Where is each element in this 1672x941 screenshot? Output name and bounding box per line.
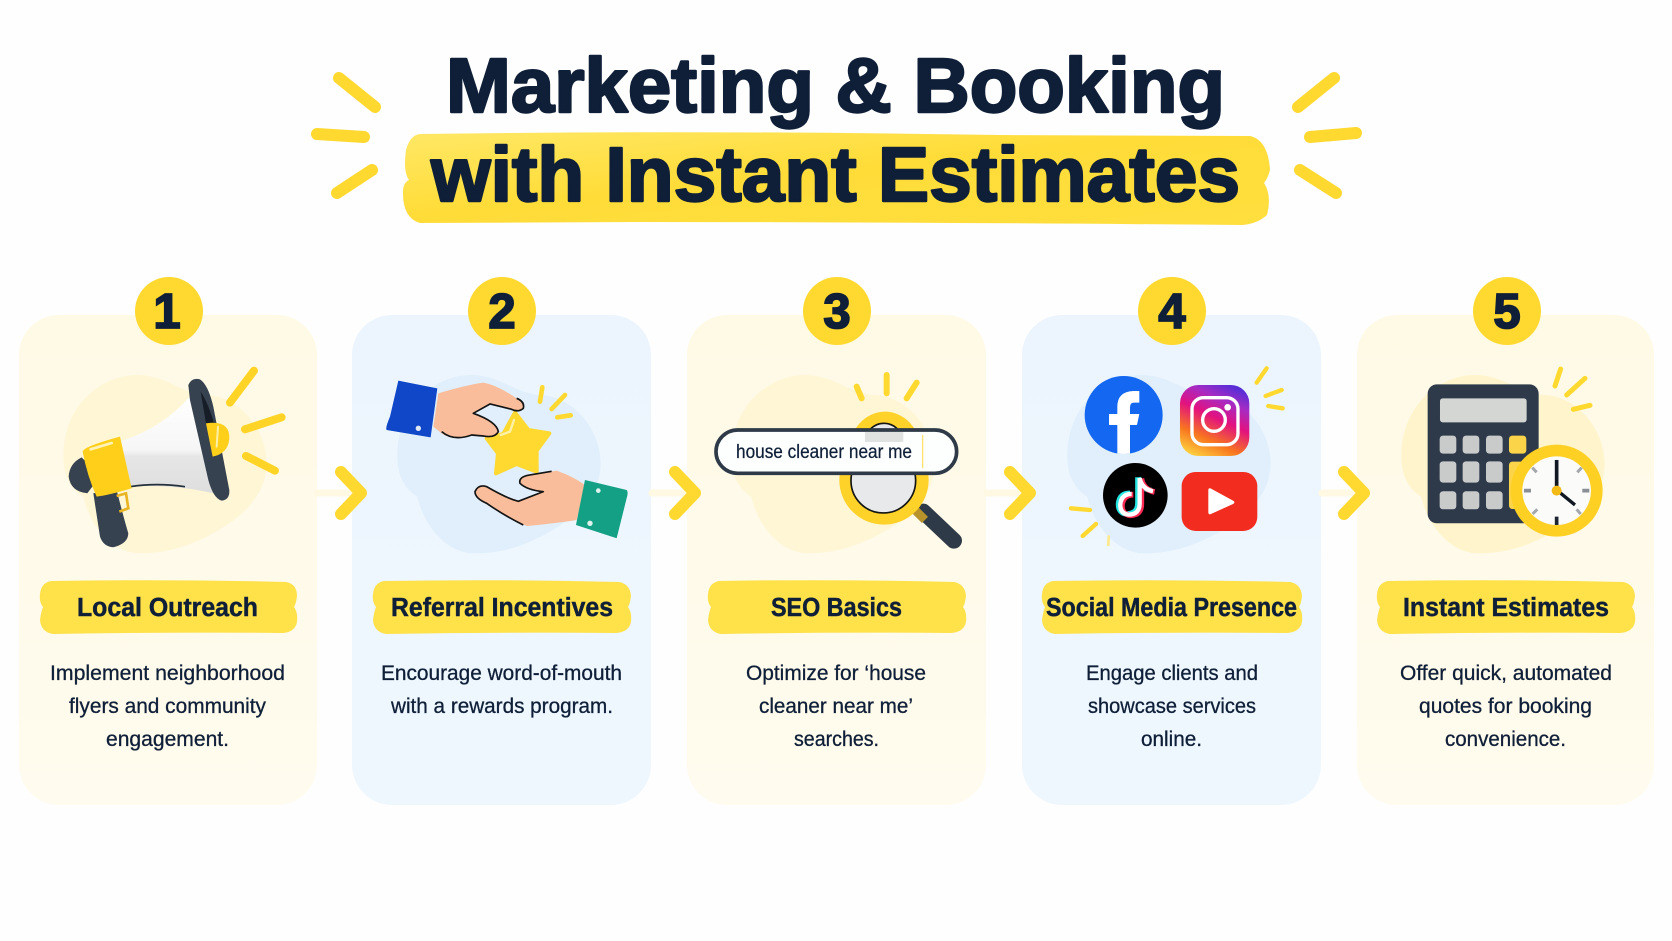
arrow 1 to 2 <box>318 472 361 514</box>
icon: hands and star <box>386 381 628 538</box>
icon blob <box>1067 375 1271 553</box>
heading pill: local outreach: Local Outreach <box>77 594 258 622</box>
panel: social media presence <box>1022 277 1321 805</box>
title rays right <box>1298 78 1356 193</box>
arrow 3 to 4 <box>987 472 1030 514</box>
tiktok <box>1103 463 1168 528</box>
badge 4 <box>1138 277 1206 345</box>
icon: social logos <box>1071 368 1283 545</box>
icon: magnifier and search bar <box>716 375 957 541</box>
arrow 2 to 3 <box>652 472 695 514</box>
title line 1: Marketing & Booking <box>446 43 1225 129</box>
title rays left <box>317 78 375 193</box>
description: local outreach: Implement neighborhood <box>50 661 285 685</box>
panel: seo basics <box>687 277 986 805</box>
description: social media presence: online. <box>1141 727 1202 751</box>
description: seo basics: Optimize for ‘house <box>746 661 926 685</box>
heading pill: instant estimates: Instant Estimates <box>1403 594 1609 622</box>
badge 4: 4 <box>1158 285 1186 339</box>
description: local outreach <box>50 661 285 751</box>
heading pill: social media presence: Social Media Presence <box>1046 594 1297 622</box>
panel: local outreach <box>19 277 317 805</box>
description: seo basics: searches. <box>794 727 879 751</box>
badge 3 <box>803 277 871 345</box>
description: instant estimates: convenience. <box>1445 727 1566 751</box>
instagram <box>1180 385 1249 456</box>
panel: instant estimates <box>1357 277 1654 805</box>
description: local outreach: flyers and community <box>69 694 266 718</box>
badge 5: 5 <box>1493 285 1521 339</box>
arrow 4 to 5 <box>1322 472 1364 514</box>
description: instant estimates: Offer quick, automated <box>1400 661 1612 685</box>
youtube <box>1182 472 1257 531</box>
icon: megaphone <box>69 371 282 547</box>
title line 2: with Instant Estimates <box>430 132 1240 218</box>
description: referral incentives: Encourage word-of-mouth <box>381 661 622 685</box>
description: seo basics <box>746 661 926 751</box>
badge 3: 3 <box>823 285 851 339</box>
description: instant estimates <box>1400 661 1612 751</box>
heading pill: social media presence <box>1042 580 1302 634</box>
heading pill: referral incentives <box>373 580 631 634</box>
description: referral incentives <box>381 661 622 718</box>
badge 5 <box>1473 277 1541 345</box>
icon: calculator and clock <box>1428 369 1603 537</box>
badge 2 <box>468 277 536 345</box>
title highlight brush <box>403 132 1270 225</box>
description: social media presence <box>1086 661 1258 751</box>
badge 1: 1 <box>153 285 181 339</box>
heading pill: local outreach <box>40 580 297 634</box>
icon blob <box>63 375 267 553</box>
description: seo basics: cleaner near me’ <box>759 694 913 718</box>
panel: referral incentives <box>352 277 651 805</box>
heading pill: seo basics: SEO Basics <box>771 594 902 622</box>
icon blob <box>1401 375 1605 553</box>
description: social media presence: Engage clients and <box>1086 661 1258 685</box>
facebook <box>1085 376 1163 457</box>
description: local outreach: engagement. <box>106 727 229 751</box>
search bar text: house cleaner near me <box>736 441 912 463</box>
icon blob <box>731 375 935 553</box>
heading pill: seo basics <box>708 580 966 634</box>
description: referral incentives: with a rewards program. <box>390 694 613 718</box>
icon blob <box>397 375 601 553</box>
badge 1 <box>135 277 203 345</box>
description: instant estimates: quotes for booking <box>1419 694 1592 718</box>
title <box>317 43 1356 225</box>
description: social media presence: showcase services <box>1088 694 1256 718</box>
heading pill: instant estimates <box>1377 580 1635 634</box>
badge 2: 2 <box>488 285 516 339</box>
heading pill: referral incentives: Referral Incentives <box>391 594 613 622</box>
